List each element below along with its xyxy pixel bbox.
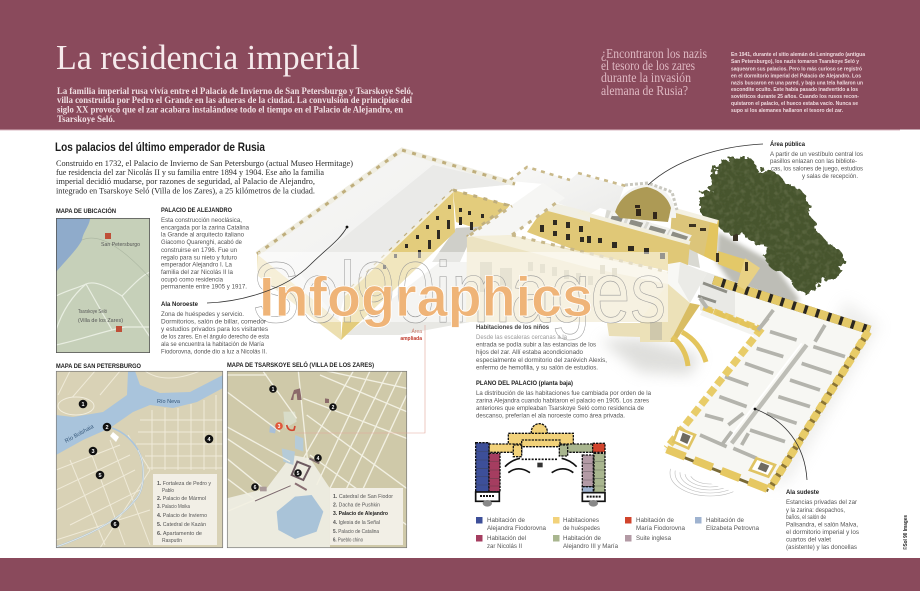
callout: ala noroeste: Dormitorios, salón de billar, comedor (161, 318, 267, 326)
side note text: San Petersburgo), los nazis tomaron Tsarskoye Seló y (731, 59, 859, 65)
legend: 6. Pueblo chino (333, 538, 363, 544)
windows (383, 205, 484, 269)
callout: ala sudeste: y la zarina: despachos, (786, 507, 845, 514)
southeast wing (663, 280, 870, 491)
floor plan legend: Elizabeta Petrovna (706, 525, 759, 532)
legend: 1. Fortaleza de Pedro y (157, 481, 211, 487)
partitions (700, 310, 845, 458)
map: ubicación: MAPA DE UBICACIÓN (56, 206, 116, 215)
parapet (257, 150, 515, 254)
callout: ala sudeste: (asistente) y las doncellas (786, 544, 857, 551)
floor plan (476, 424, 605, 507)
text: habitaciones de los niños: enfermo de hemofilia, y su salón de estudios. (476, 364, 598, 372)
legend: Rasputín (162, 538, 182, 544)
corridor (732, 345, 807, 443)
floor plan legend: María Fiodorovna (636, 525, 685, 532)
side note text: quistaron el palacio, el hueco estaba vacío. Nunca se (731, 101, 858, 107)
map: ubicación (56, 206, 150, 353)
central rear roofs (510, 167, 690, 275)
callout: ala sudeste: Estancias privadas del zar (786, 499, 858, 506)
enlarged area marker: ampliada (400, 336, 422, 342)
text: palacio de alejandro: la Grande al arquitecto italiano (161, 232, 244, 238)
map markers: 3 (278, 424, 281, 430)
map markers (79, 400, 213, 528)
intro text: siglo XX provocó que el zar acabara instalándose todo el tiempo en el Palacio de Alejandro, en (57, 104, 403, 114)
floor plan legend: Habitación del (487, 535, 526, 542)
map: ubicación: Tsarskoye Seló (78, 309, 107, 315)
text: habitaciones de los niños: Desde las escaleras cercanas a la (476, 334, 567, 341)
map markers: 5 (297, 471, 300, 477)
text: palacio de alejandro (161, 207, 249, 290)
map markers: 4 (207, 437, 211, 443)
central wing (466, 183, 768, 366)
text: plano del palacio: descanso, preferían el ala noroeste como área privada. (476, 412, 625, 420)
front portico roof (668, 262, 707, 303)
legend: 4. Iglesia de la Señal (333, 520, 380, 526)
callout: ala noroeste: ala se encuentra la habitación de María (161, 341, 264, 348)
callout: ala noroeste: de los zares. En el ángulo derecho de esta (161, 334, 269, 340)
callout: ala sudeste: el dormitorio imperial y los (786, 529, 859, 536)
west wing (257, 150, 515, 340)
court floor (432, 226, 488, 262)
watermark outline: Sol90images (252, 245, 666, 341)
outer end facade (257, 254, 341, 340)
text: plano del palacio: PLANO DEL PALACIO (planta baja) (476, 380, 573, 387)
intro text: villa construida por Pedro el Grande en las afueras de la ciudad. La convulsión de principios del (57, 95, 412, 105)
enlarged area marker: Área (411, 328, 422, 335)
text: plano del palacio: zarina Alejandra cuando habitaron el palacio en 1905. Los zares (476, 398, 649, 404)
text: habitaciones de los niños: entrada se podía subir a las estancias de los (476, 342, 596, 348)
roof (257, 150, 515, 320)
text: habitaciones de los niños: Habitaciones de los niños (476, 324, 550, 331)
callout: área pública: cas, los salones de juego, estudios (771, 166, 863, 172)
floor plan legend: zar Nicolás II (487, 543, 522, 550)
credit: ©Sol 90 Images (902, 515, 909, 550)
legend (153, 474, 217, 545)
callout: ala sudeste: baños, el salón de (786, 514, 826, 521)
text: palacio de alejandro: regalo para su nieto y futuro (161, 254, 237, 262)
callout: área pública: A partir de un vestíbulo central los (770, 151, 863, 158)
text: plano del palacio (476, 380, 651, 420)
section paragraph: fue residencia del zar Nicolás II y su familia entre 1894 y 1904. Ese año la familia (56, 167, 324, 177)
stairs (672, 337, 688, 366)
palace illustration (252, 150, 880, 496)
corner towers (673, 428, 695, 448)
map markers: 6 (254, 485, 257, 491)
text: palacio de alejandro: familia del zar Nicolás II la (161, 269, 233, 276)
question heading: ¿Encontraron los nazis (601, 46, 707, 61)
legend: 4. Palacio de Invierno (157, 513, 207, 519)
map markers: 2 (105, 425, 109, 431)
bottom band (0, 558, 920, 591)
text: habitaciones de los niños: hijos del zar. Allí estaba acondicionado (476, 349, 583, 356)
court facing facade (341, 190, 455, 340)
callout: ala sudeste: Ala sudeste (786, 489, 819, 496)
map: san petersburgo (56, 363, 223, 548)
map markers: 1 (81, 402, 85, 408)
crenellated walls (667, 280, 870, 491)
section heading: Los palacios del último emperador de Rusia (55, 142, 266, 154)
watermark wash (258, 252, 668, 322)
question heading: durante la invasión (601, 70, 691, 85)
text: palacio de alejandro: Giacomo Quarenghi, acabó de (161, 239, 242, 246)
side note text: nazis buscaron en una pared, y bajo una tela hallaron un (731, 80, 863, 86)
map markers: 6 (113, 522, 117, 528)
map: san petersburgo: MAPA DE SAN PETERSBURGO (56, 363, 141, 370)
court back wall (453, 190, 510, 232)
floor plan legend: Alejandro III y María (563, 543, 618, 550)
question heading (601, 46, 707, 98)
river label: Bolshaia: Río Bolshaia (64, 424, 96, 445)
back rooms (600, 207, 760, 290)
side note text: supo si los alemanes hallaron el tesoro del zar. (731, 108, 844, 114)
palace marks (291, 388, 302, 400)
floor plan legend: de huéspedes (563, 525, 600, 532)
callout: ala noroeste: y estudios privados para los visitantes (161, 326, 268, 333)
question heading: el tesoro de los zares (601, 58, 695, 73)
enlarged area marker (295, 325, 425, 433)
floor plan legend: Suite inglesa (636, 535, 671, 542)
watermark fill: Infographics (259, 265, 593, 328)
side note text (731, 52, 865, 114)
callout: área pública: pasillos enlazan con las bibliote- (770, 158, 857, 165)
floor plan legend: Alejandra Fiodorovna (487, 525, 546, 532)
callout: área pública (648, 139, 863, 185)
section paragraph: Construido en 1732, el Palacio de Invierno de San Petersburgo (actual Museo Hermitage) (56, 158, 353, 168)
callout: área pública: y salas de recepción. (802, 173, 858, 180)
side note text: En 1941, durante el sitio alemán de Leningrado (antigua (731, 52, 865, 58)
map: ubicación: (Villa de los Zares) (78, 318, 123, 324)
title: La residencia imperial (56, 38, 360, 77)
text: palacio de alejandro: construirse en 1796. Fue un (161, 247, 237, 254)
floor plan legend: Habitación de (487, 517, 525, 524)
question heading: alemana de Rusia? (601, 83, 688, 98)
rotunda (612, 183, 677, 222)
section paragraph: integrado en Tsarskoye Seló (Villa de los Zares), a 25 kilómetros de la ciudad. (56, 186, 315, 196)
floor plan legend (476, 517, 759, 550)
map markers: 3 (91, 449, 95, 455)
side note text: en el dormitorio imperial del Palacio de Alejandro. Los (731, 74, 861, 80)
icon: tree (699, 157, 844, 293)
floor plan legend: Habitaciones (563, 517, 599, 524)
map: tsarskoye selo: MAPA DE TSARSKOYE SELÓ (VILLA DE LOS ZARES) (227, 360, 374, 369)
text: plano del palacio: La distribución de las habitaciones fue cambiada por orden de la (476, 390, 651, 397)
river label: Neva: Río Neva (157, 399, 181, 405)
tree shadow and ground (345, 232, 880, 490)
text: habitaciones de los niños: especialmente el dormitorio del zarévich Alexis, (476, 357, 607, 364)
park (227, 455, 330, 548)
legend: 5. Palacio de Catalina (333, 529, 380, 535)
legend: 5. Catedral de Kazán (157, 522, 206, 528)
map markers: 5 (98, 473, 102, 479)
intro text: La familia imperial rusa vivía entre el Palacio de Invierno de San Petersburgo y Tsarskoye Seló, (57, 86, 413, 96)
floor plan legend: Habitación de (636, 517, 674, 524)
steps (698, 283, 727, 302)
intro text (57, 86, 413, 124)
text: palacio de alejandro: permanente entre 1905 y 1917. (161, 284, 247, 290)
floor plan legend: Habitación de (563, 535, 601, 542)
map: ubicación: San Petersburgo (101, 242, 140, 248)
legend (330, 488, 403, 545)
side note text: saquearon sus palacios. Pero lo más curioso se registró (731, 66, 862, 72)
text: palacio de alejandro: emperador Alejandro I. La (161, 262, 232, 268)
map: tsarskoye selo (227, 360, 407, 548)
legend: 3. Palacio Moika (157, 504, 191, 510)
legend: Pablo (162, 488, 174, 494)
text: palacio de alejandro: PALACIO DE ALEJANDRO (161, 207, 232, 214)
callout: área pública: Área pública (770, 139, 805, 148)
callout: ala sudeste (754, 408, 859, 551)
callout: ala noroeste (161, 226, 348, 356)
callout: ala noroeste: Ala Noroeste (161, 301, 198, 308)
callout: ala sudeste: cuartos del valet (786, 536, 831, 544)
callout: ala noroeste: Fiodorovna, donde dio a luz a Nicolás II. (161, 348, 267, 356)
legend: 6. Apartamento de (157, 531, 202, 537)
callout: ala noroeste: Zona de huéspedes y servicio. (161, 311, 244, 318)
map markers (251, 385, 337, 491)
text: palacio de alejandro: Esta construcción neoclásica, (161, 217, 242, 224)
text: habitaciones de los niños (476, 324, 607, 372)
callout: ala sudeste: Palisandra, el salón Malva, (786, 522, 858, 528)
legend: 1. Catedral de San Fiodor (333, 494, 393, 500)
top banner (0, 0, 920, 130)
text: palacio de alejandro: encargada por la zarina Catalina (161, 224, 249, 232)
legend: 2. Dacha de Pushkin (333, 502, 380, 508)
legend: 3. Palacio de Alejandro (333, 511, 389, 517)
legend: 2. Palacio de Mármol (157, 496, 206, 502)
side note text: soviéticos durante 25 años. Cuando los rusos recon- (731, 94, 859, 100)
map markers: 1 (272, 387, 275, 393)
map markers: 4 (317, 456, 320, 462)
intro text: Tsarskoye Seló. (57, 114, 115, 124)
section paragraph: imperial decidió mudarse, por razones de seguridad, al Palacio de Alejandro, (56, 176, 315, 186)
floor plan legend: Habitación de (706, 517, 744, 524)
section paragraph (56, 158, 353, 196)
side note text: escondite oculto. Este había pasado inadvertido a los (731, 87, 858, 93)
text: palacio de alejandro: ocupó como residencia (161, 276, 223, 284)
map markers: 2 (332, 405, 335, 411)
garden arcs (670, 468, 734, 496)
text: plano del palacio: anteriores que empleaban Tsarskoye Seló como residencia de (476, 405, 644, 412)
